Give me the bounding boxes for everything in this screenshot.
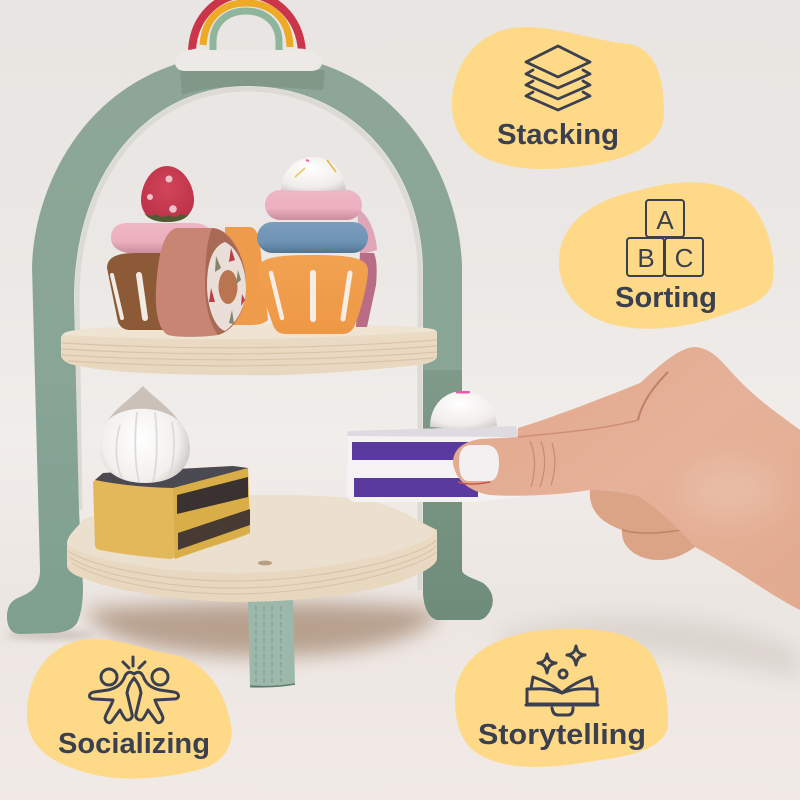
icon: open book with sparkles xyxy=(526,646,598,715)
badge: Stacking xyxy=(452,27,664,169)
block letters: B xyxy=(637,243,655,273)
icon: stacked layers xyxy=(526,46,590,110)
slice of white cake with purple stripes xyxy=(347,391,520,502)
hand holding cake xyxy=(453,347,800,610)
badge: Sorting xyxy=(559,182,774,329)
label: Socializing xyxy=(58,728,210,760)
badge: Socializing xyxy=(27,639,232,779)
whipped cream topper xyxy=(100,386,190,483)
stand: arch xyxy=(7,53,493,634)
swiss roll xyxy=(156,228,246,337)
slice of yellow cake xyxy=(93,466,250,559)
table shadows xyxy=(5,602,800,680)
cupcake: orange stacked xyxy=(257,157,377,334)
stand: centre rear post xyxy=(248,600,295,688)
upper shelf xyxy=(61,324,437,375)
stand: rainbow topper xyxy=(175,0,322,71)
label: Stacking xyxy=(497,119,619,151)
block letters xyxy=(637,205,693,273)
icon: two figures high-fiving xyxy=(90,657,178,723)
lower shelf xyxy=(67,495,437,602)
orange block behind roll xyxy=(225,227,268,325)
block letters: A xyxy=(656,205,674,235)
thumb nail xyxy=(459,445,499,481)
label: Sorting xyxy=(615,282,717,314)
cupcake: brown with strawberry xyxy=(107,166,210,330)
badge: Storytelling xyxy=(455,629,668,767)
icon: alphabet blocks xyxy=(627,200,703,276)
block letters: C xyxy=(675,243,693,273)
stand: inner bevel xyxy=(77,89,420,590)
label: Storytelling xyxy=(478,719,646,751)
